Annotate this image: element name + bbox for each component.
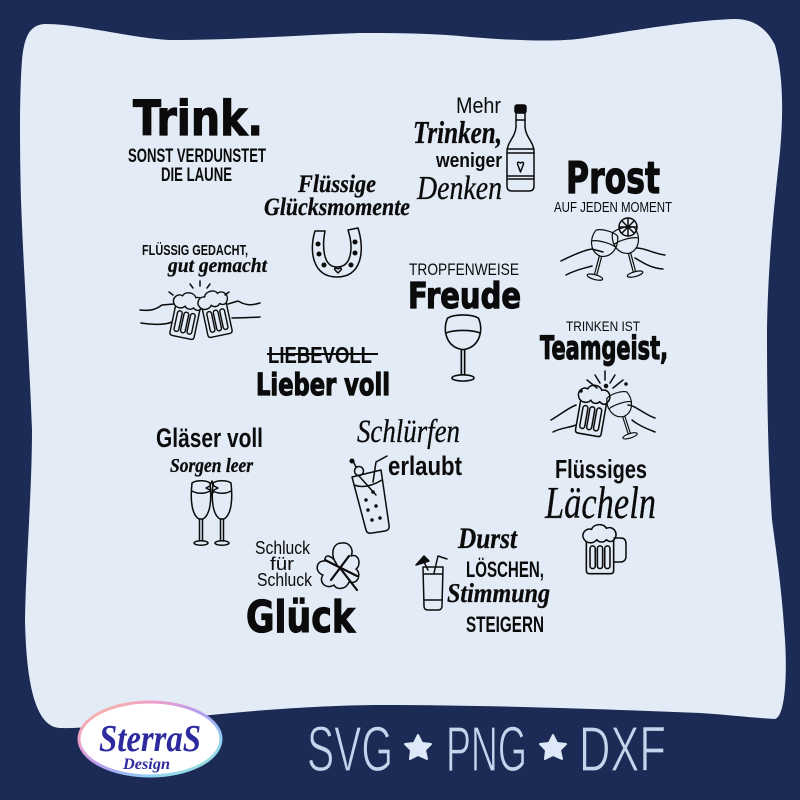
- quote: Mehr Trinken, weniger Denken: weniger: [435, 150, 502, 172]
- quote: Schluck für Schluck Glück: Glück: [246, 592, 356, 643]
- quote: Durst löschen, Stimmung steigern: LÖSCHEN,: [466, 557, 544, 582]
- icon: wine glass: [445, 315, 481, 381]
- icon: four-leaf clover: [317, 543, 359, 590]
- quote: Tropfenweise Freude: Freude: [408, 276, 521, 317]
- quote: Durst löschen, Stimmung steigern: Stimmung: [447, 578, 550, 608]
- star icon: [540, 735, 566, 759]
- quote: Trink, sonst verdunstet die Laune: DIE LAUNE: [161, 165, 232, 186]
- icon: two wine glasses clinking with hands and citrus slice: [561, 218, 665, 283]
- quote: Gläser voll, Sorgen leer: Sorgen leer: [170, 455, 253, 477]
- quote: Flüssiges Lächeln: Flüssiges: [555, 454, 647, 484]
- quote: Durst löschen, Stimmung steigern: Durst: [457, 522, 518, 555]
- quote: Flüssige Glücksmomente: [264, 171, 410, 221]
- quote: Flüssig gedacht, gut gemacht: FLÜSSIG GEDACHT,: [142, 242, 248, 259]
- quote: Trinken ist Teamgeist: TRINKEN IST: [566, 318, 640, 334]
- format line: SVG PNG DXF: DXF: [579, 713, 666, 785]
- icon: cocktail glass with cherry and straw: [350, 456, 389, 533]
- icon: two beer mugs clinking with hands: [140, 281, 260, 340]
- icon: beer mug and wine glass clinking: [551, 371, 655, 442]
- quote: Liebevoll, lieber voll: LIEBEVOLL: [268, 342, 372, 368]
- icon: long drink with umbrella and straw: [416, 556, 447, 610]
- icon: champagne flutes with sparkle: [191, 481, 232, 545]
- quote: Mehr Trinken, weniger Denken: Trinken,: [413, 114, 502, 150]
- icon: bottle: [507, 105, 534, 191]
- logo: SterraS Design: SterraS: [99, 718, 201, 760]
- logo: SterraS Design: [79, 702, 221, 776]
- quote: Durst löschen, Stimmung steigern: [447, 522, 550, 637]
- quote: Flüssig gedacht, gut gemacht: gut gemacht: [167, 255, 268, 277]
- quote: Trinken ist Teamgeist: Teamgeist,: [540, 329, 668, 367]
- quote: Trink, sonst verdunstet die Laune: Trink.: [133, 91, 263, 147]
- quote: Prost auf jeden Moment: AUF JEDEN MOMENT: [554, 199, 672, 216]
- quote: Mehr Trinken, weniger Denken: Mehr: [456, 93, 501, 118]
- icon: beer mug: [583, 525, 626, 574]
- quote: Liebevoll, lieber voll: [256, 342, 390, 403]
- quote: Flüssig gedacht, gut gemacht: [142, 242, 268, 277]
- quote: Flüssige Glücksmomente: Flüssige: [297, 171, 376, 198]
- quote: Schluck für Schluck Glück: Schluck: [257, 570, 313, 590]
- quote: Flüssiges Lächeln: [544, 454, 656, 528]
- quote: Trink, sonst verdunstet die Laune: SONST VERDUNSTET: [128, 146, 266, 167]
- format line: SVG PNG DXF: [307, 713, 666, 785]
- quote: Flüssiges Lächeln: Lächeln: [544, 477, 656, 528]
- quote: Trinken ist Teamgeist: [540, 318, 668, 367]
- quote: Tropfenweise Freude: TROPFENWEISE: [409, 260, 519, 279]
- icon: horseshoe: [312, 228, 361, 277]
- star icon: [405, 735, 431, 759]
- quote: Mehr Trinken, weniger Denken: Denken: [416, 170, 502, 207]
- quote: Schluck für Schluck Glück: [246, 538, 356, 643]
- format line: SVG PNG DXF: PNG: [446, 713, 527, 785]
- quote: Mehr Trinken, weniger Denken: [413, 93, 502, 207]
- quote: Schluck für Schluck Glück: Schluck: [255, 538, 311, 558]
- quote: Schlürfen erlaubt: Schlürfen: [357, 414, 460, 450]
- quote: Gläser voll, Sorgen leer: [156, 423, 263, 477]
- quote: Prost auf jeden Moment: Prost: [566, 153, 660, 204]
- quote: Tropfenweise Freude: [408, 260, 521, 317]
- quote: Durst löschen, Stimmung steigern: STEIGERN: [466, 612, 544, 637]
- quote: Schluck für Schluck Glück: für: [270, 554, 294, 574]
- quote: Flüssige Glücksmomente: Glücksmomente: [264, 194, 410, 221]
- quote: Schlürfen erlaubt: [357, 414, 462, 481]
- quote: Trink, sonst verdunstet die Laune: [128, 91, 266, 186]
- quote: Liebevoll, lieber voll: Lieber voll: [256, 368, 390, 403]
- format line: SVG PNG DXF: SVG: [307, 713, 393, 785]
- quote: Prost auf jeden Moment: [554, 153, 672, 216]
- quote: Gläser voll, Sorgen leer: Gläser voll: [156, 423, 263, 453]
- logo: SterraS Design: Design: [122, 756, 170, 773]
- quote: Schlürfen erlaubt: erlaubt: [388, 451, 462, 481]
